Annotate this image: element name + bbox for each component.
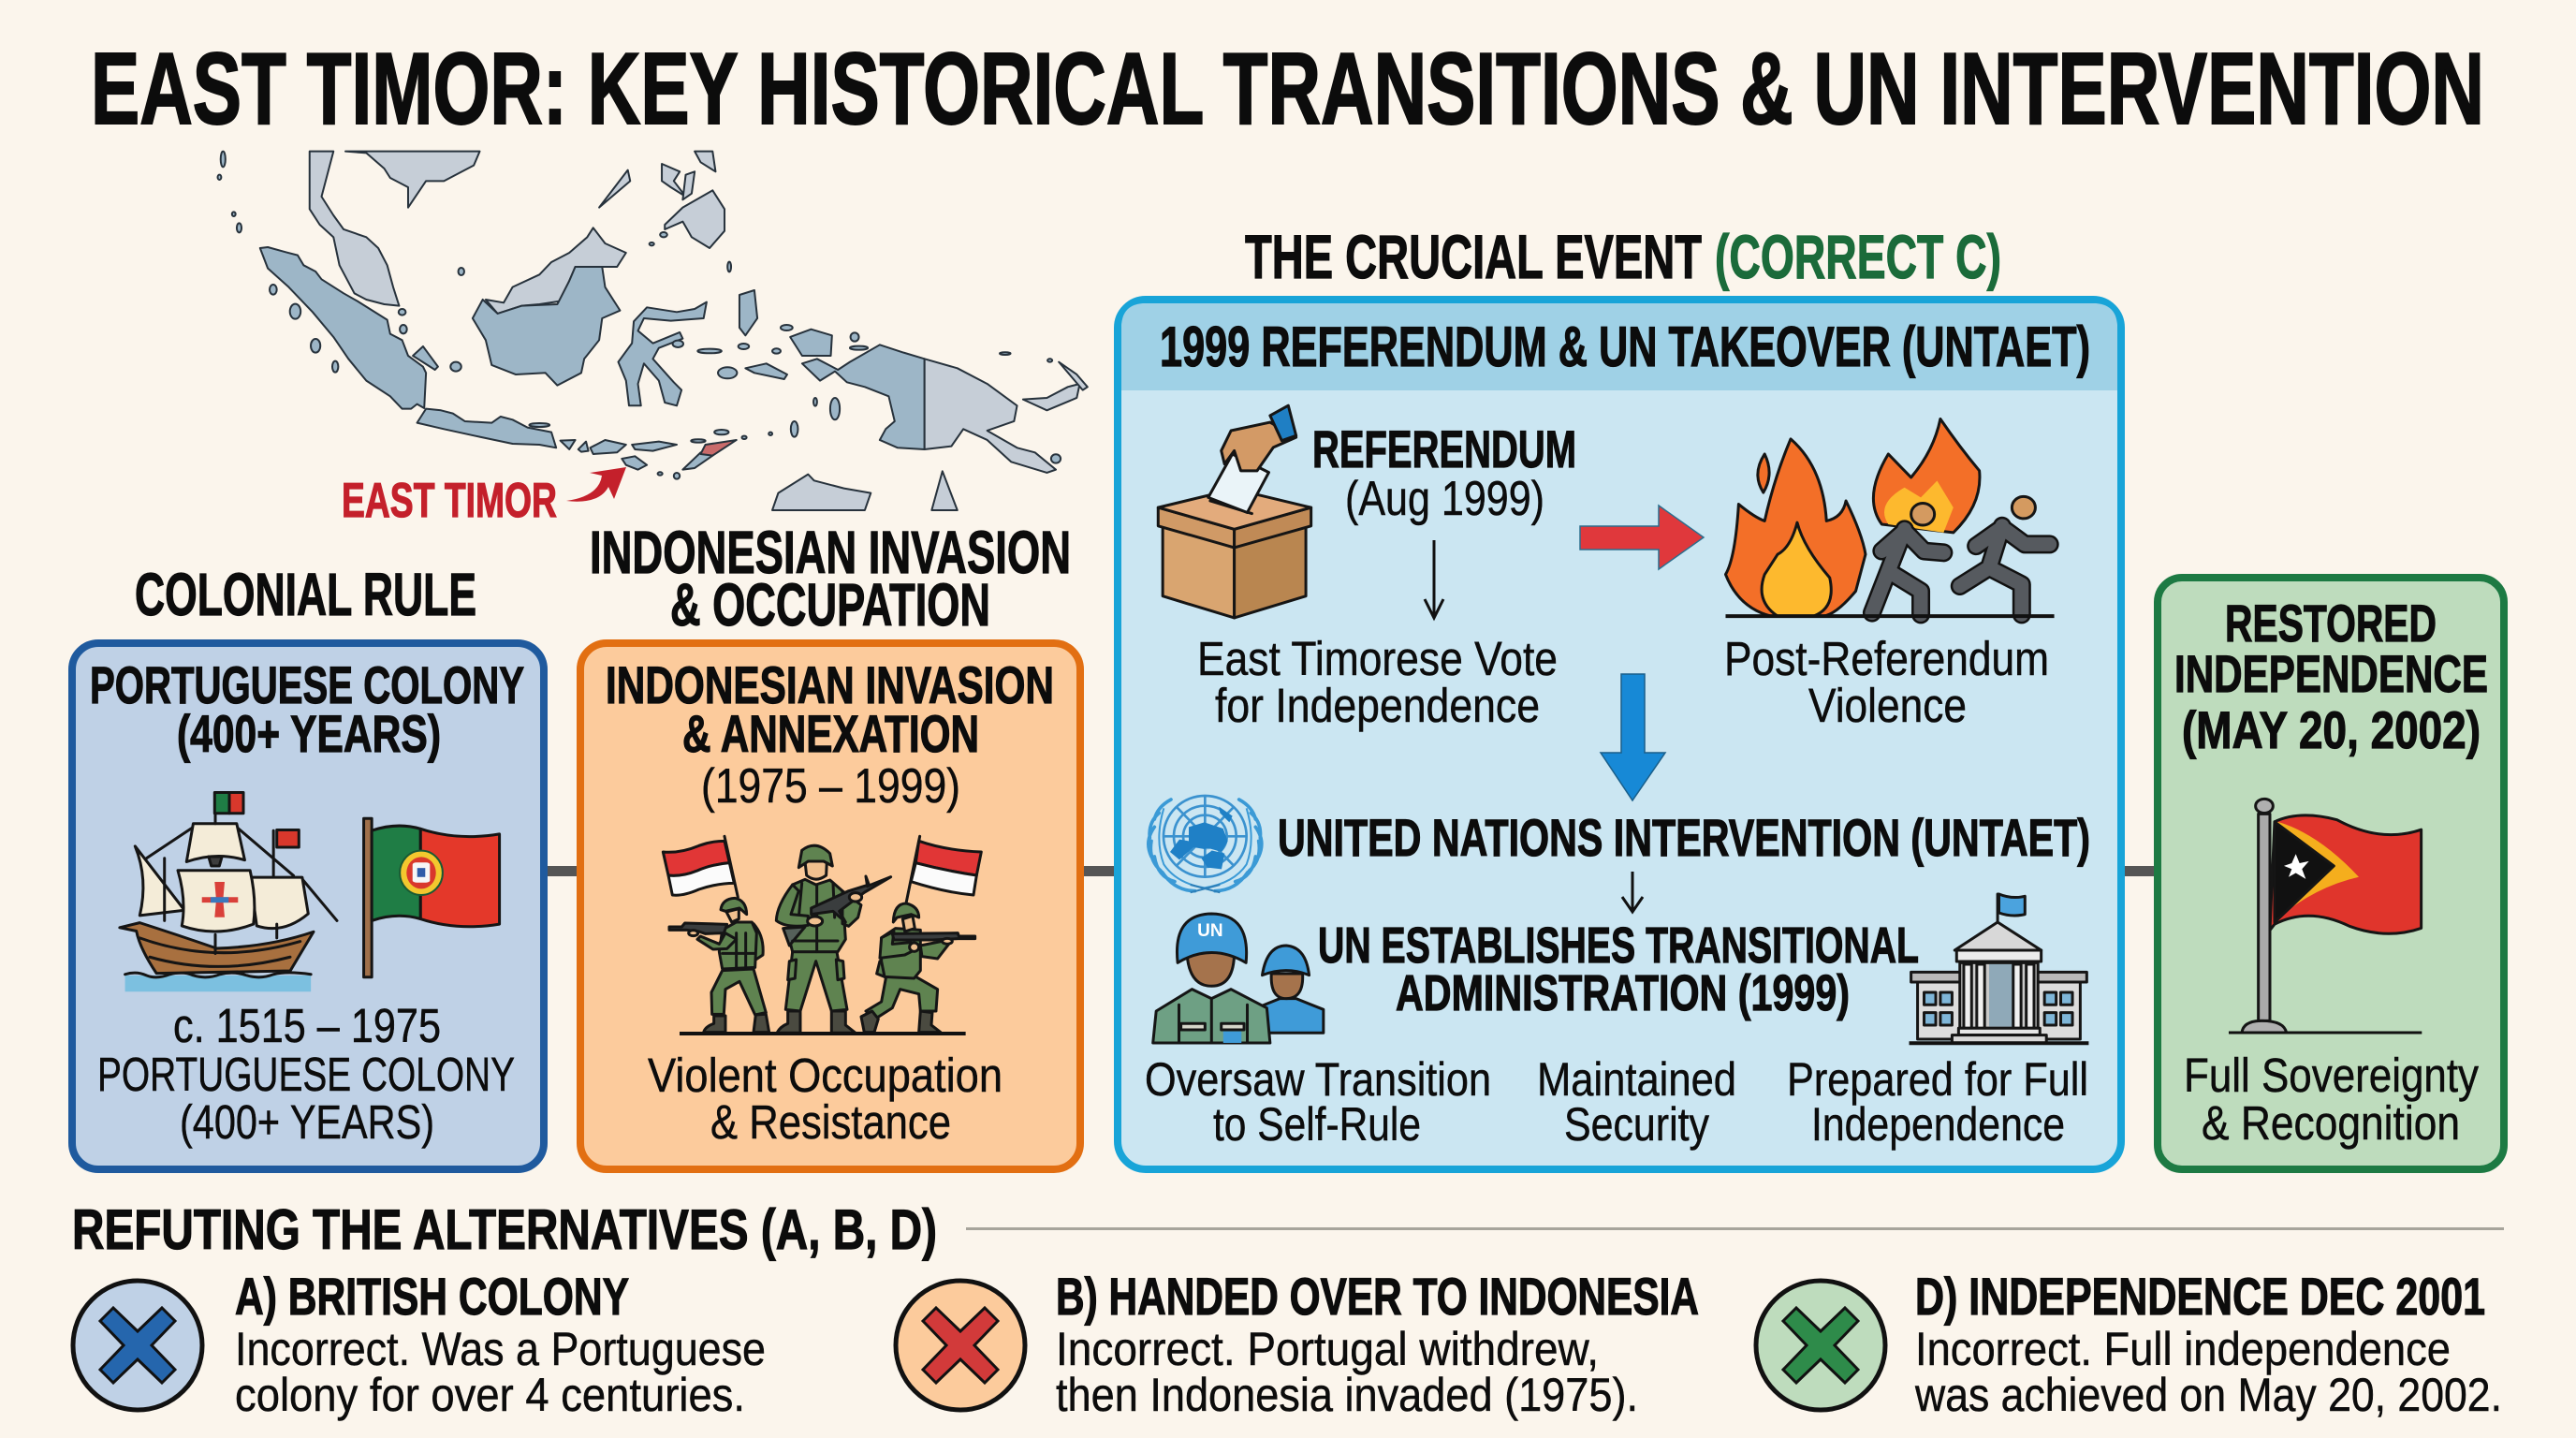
arrow: blue down — [1601, 674, 1665, 800]
arrow: red right — [1580, 506, 1704, 569]
heading: Indonesian invasion and occupation: & OCCUPATION — [670, 571, 990, 638]
alternative A — [73, 1267, 766, 1421]
icon: red X — [896, 1281, 1025, 1410]
icon: green X — [1756, 1281, 1885, 1410]
label: referendum: REFERENDUM — [1312, 419, 1576, 478]
option text — [235, 1323, 766, 1421]
panel dates: (1975 – 1999) — [701, 759, 960, 814]
alternative B — [896, 1267, 1699, 1421]
heading: Indonesian invasion and occupation — [590, 519, 1071, 638]
label: three outcomes: Prepared for Full — [1787, 1053, 2088, 1106]
panel text: & Recognition — [2202, 1096, 2460, 1150]
panel heading: (400+ YEARS) — [177, 704, 441, 763]
East Timor highlighted — [701, 440, 737, 456]
arrow: vote down — [1425, 540, 1443, 618]
alternative D — [1756, 1267, 2502, 1421]
panel heading — [90, 655, 524, 763]
heading: refuting the alternatives: REFUTING THE ALTERNATIVES (A, B, D) — [72, 1198, 937, 1261]
panel text: (400+ YEARS) — [180, 1095, 434, 1149]
label: post-referendum violence: Post-Referendum — [1724, 632, 2049, 685]
panel text — [97, 999, 515, 1149]
map of Southeast Asia — [218, 152, 1088, 510]
heading: the crucial event: (CORRECT C) — [1715, 222, 2001, 291]
panel heading: & ANNEXATION — [682, 704, 979, 763]
icon: soldiers with Indonesian flags — [663, 836, 981, 1034]
heading: Indonesian invasion and occupation: INDONESIAN INVASION — [590, 519, 1071, 586]
panel text: Full Sovereignty — [2184, 1049, 2479, 1102]
panel text: c. 1515 – 1975 — [173, 999, 441, 1052]
arrow: to East Timor — [566, 467, 626, 502]
label: East Timorese vote — [1197, 632, 1558, 732]
icon: UN peacekeepers — [1153, 914, 1324, 1043]
option heading: B) HANDED OVER TO INDONESIA — [1056, 1267, 1699, 1326]
arrow: UN down — [1622, 872, 1643, 912]
label: three outcomes: Security — [1564, 1098, 1709, 1151]
icon: caravel ship — [120, 792, 337, 991]
label: post-referendum violence: Violence — [1808, 679, 1967, 732]
label: post-referendum violence — [1724, 632, 2049, 732]
panel heading: (MAY 20, 2002) — [2182, 700, 2481, 759]
panel header band — [1121, 303, 2117, 390]
option text: Incorrect. Was a Portuguese — [235, 1323, 766, 1375]
panel text — [648, 1049, 1003, 1149]
panel heading: RESTORED — [2225, 594, 2437, 653]
label: three outcomes: Independence — [1811, 1098, 2065, 1151]
panel: Portuguese colony — [72, 643, 544, 1169]
option text — [1056, 1323, 1638, 1421]
label: UN establishes transitional administration — [1318, 917, 1919, 1021]
divider — [966, 1227, 2504, 1230]
icon: UN emblem — [1149, 796, 1262, 892]
icon: blue X — [73, 1281, 202, 1410]
label: UN establishes transitional administration: ADMINISTRATION (1999) — [1396, 965, 1850, 1021]
label: referendum: (Aug 1999) — [1345, 472, 1544, 526]
icon: government building — [1910, 894, 2088, 1043]
panel text: & Resistance — [710, 1095, 951, 1149]
label: three outcomes — [1145, 1053, 2088, 1151]
label: East Timor: EAST TIMOR — [342, 474, 557, 528]
panel: 1999 referendum and UN takeover — [1118, 300, 2121, 1169]
panel text — [2184, 1049, 2479, 1150]
icon: ballot box — [1158, 405, 1311, 618]
panel heading: PORTUGUESE COLONY — [90, 655, 524, 714]
option text: Incorrect. Portugal withdrew, — [1056, 1323, 1599, 1375]
option text: colony for over 4 centuries. — [235, 1369, 745, 1421]
icon: fire and fleeing people — [1725, 418, 2055, 616]
panel: Indonesian invasion — [580, 643, 1080, 1169]
heading: colonial rule: COLONIAL RULE — [135, 561, 476, 628]
option text — [1914, 1323, 2502, 1421]
icon: UN peacekeepers: UN — [1197, 921, 1223, 941]
panel heading — [2174, 594, 2488, 759]
label: United Nations intervention: UNITED NATIONS INTERVENTION (UNTAET) — [1278, 808, 2090, 867]
panel heading: 1999 REFERENDUM & UN TAKEOVER (UNTAET) — [1160, 315, 2090, 378]
option heading: A) BRITISH COLONY — [235, 1267, 629, 1326]
panel text: PORTUGUESE COLONY — [97, 1048, 515, 1101]
heading: the crucial event: THE CRUCIAL EVENT — [1245, 222, 1702, 291]
option text: then Indonesia invaded (1975). — [1056, 1369, 1638, 1421]
label: East Timorese vote: for Independence — [1215, 679, 1540, 732]
label: three outcomes: Maintained — [1537, 1053, 1736, 1106]
label: three outcomes: Oversaw Transition — [1145, 1053, 1491, 1106]
label: East Timorese vote: East Timorese Vote — [1197, 632, 1558, 685]
icon: Portuguese flag — [364, 818, 500, 977]
label: UN establishes transitional administration: UN ESTABLISHES TRANSITIONAL — [1318, 917, 1919, 974]
panel: restored independence — [2158, 578, 2504, 1169]
option text: was achieved on May 20, 2002. — [1914, 1369, 2502, 1421]
label: three outcomes: to Self-Rule — [1213, 1098, 1421, 1151]
panel heading — [606, 655, 1054, 763]
panel heading: INDONESIAN INVASION — [606, 655, 1054, 714]
connectors between panels — [543, 866, 2159, 876]
option text: Incorrect. Full independence — [1915, 1323, 2451, 1375]
panel text: Violent Occupation — [648, 1049, 1003, 1102]
icon: Timor-Leste flag — [2229, 799, 2422, 1033]
label: referendum — [1312, 419, 1576, 526]
